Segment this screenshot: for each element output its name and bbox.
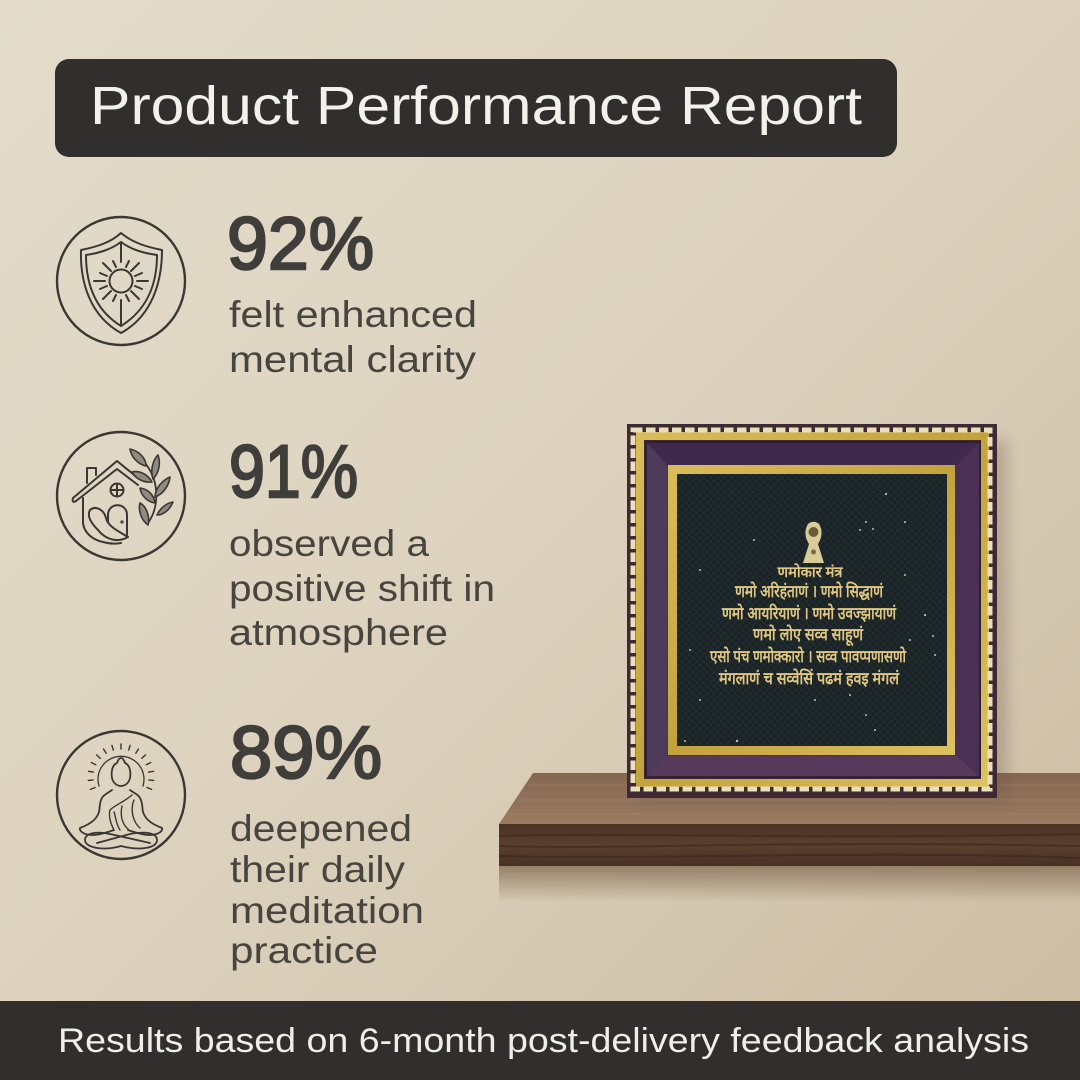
Navkar mantra inscription: णमो लोए सव्व साहूणं (752, 624, 864, 647)
text: observed a positive shift in atmosphere (229, 523, 495, 653)
text: deepened their daily meditation practice (230, 808, 424, 971)
title banner: Product Performance Report (90, 76, 862, 136)
text: deepened their daily meditation practice: meditation (230, 890, 424, 931)
speckles (684, 493, 936, 742)
text: deepened their daily meditation practice: practice (230, 930, 378, 971)
stat: 89%: 89% (230, 711, 382, 794)
icon: house with leaves (57, 432, 185, 560)
Navkar mantra inscription: एसो पंच णमोक्कारो । सव्व पावप्पणासणो (709, 646, 906, 666)
frame shadow (640, 440, 1008, 802)
footer banner: Results based on 6-month post-delivery feedback analysis (58, 1022, 1029, 1060)
dark textured panel (677, 474, 947, 746)
icon: meditating figure (57, 731, 185, 859)
footer banner (0, 1001, 1080, 1080)
Navkar mantra inscription (709, 563, 906, 688)
text: observed a positive shift in atmosphere: atmosphere (229, 612, 448, 653)
stat: 92%: 92% (227, 202, 374, 285)
Navkar mantra inscription: मंगलाणं च सव्वेसिं पढमं हवइ मंगलं (718, 668, 900, 688)
text: felt enhanced mental clarity: mental clarity (229, 339, 477, 380)
text: felt enhanced mental clarity (229, 294, 477, 380)
beaded border (633, 430, 990, 789)
icon: shield with sun (57, 217, 185, 345)
text: observed a positive shift in atmosphere: positive shift in (229, 568, 495, 609)
text: deepened their daily meditation practice: deepened (230, 808, 412, 849)
inner gold fillet (668, 465, 955, 755)
Navkar mantra inscription: णमो अरिहंताणं । णमो सिद्धाणं (734, 581, 884, 601)
seated figure emblem (803, 522, 824, 563)
framed inscription (627, 424, 1008, 802)
text: observed a positive shift in atmosphere: observed a (229, 523, 429, 564)
frame outer edge (627, 424, 997, 798)
title banner (55, 59, 897, 157)
text: felt enhanced mental clarity: felt enhanced (229, 294, 477, 335)
purple mat (646, 442, 980, 777)
stat: 91%: 91% (229, 430, 358, 513)
text: deepened their daily meditation practice: their daily (230, 849, 406, 890)
wooden shelf (499, 773, 1080, 902)
gold frame band (640, 436, 985, 783)
Navkar mantra inscription: णमोकार मंत्र (777, 563, 843, 581)
Navkar mantra inscription: णमो आयरियाणं । णमो उवज्झायाणं (721, 603, 897, 623)
